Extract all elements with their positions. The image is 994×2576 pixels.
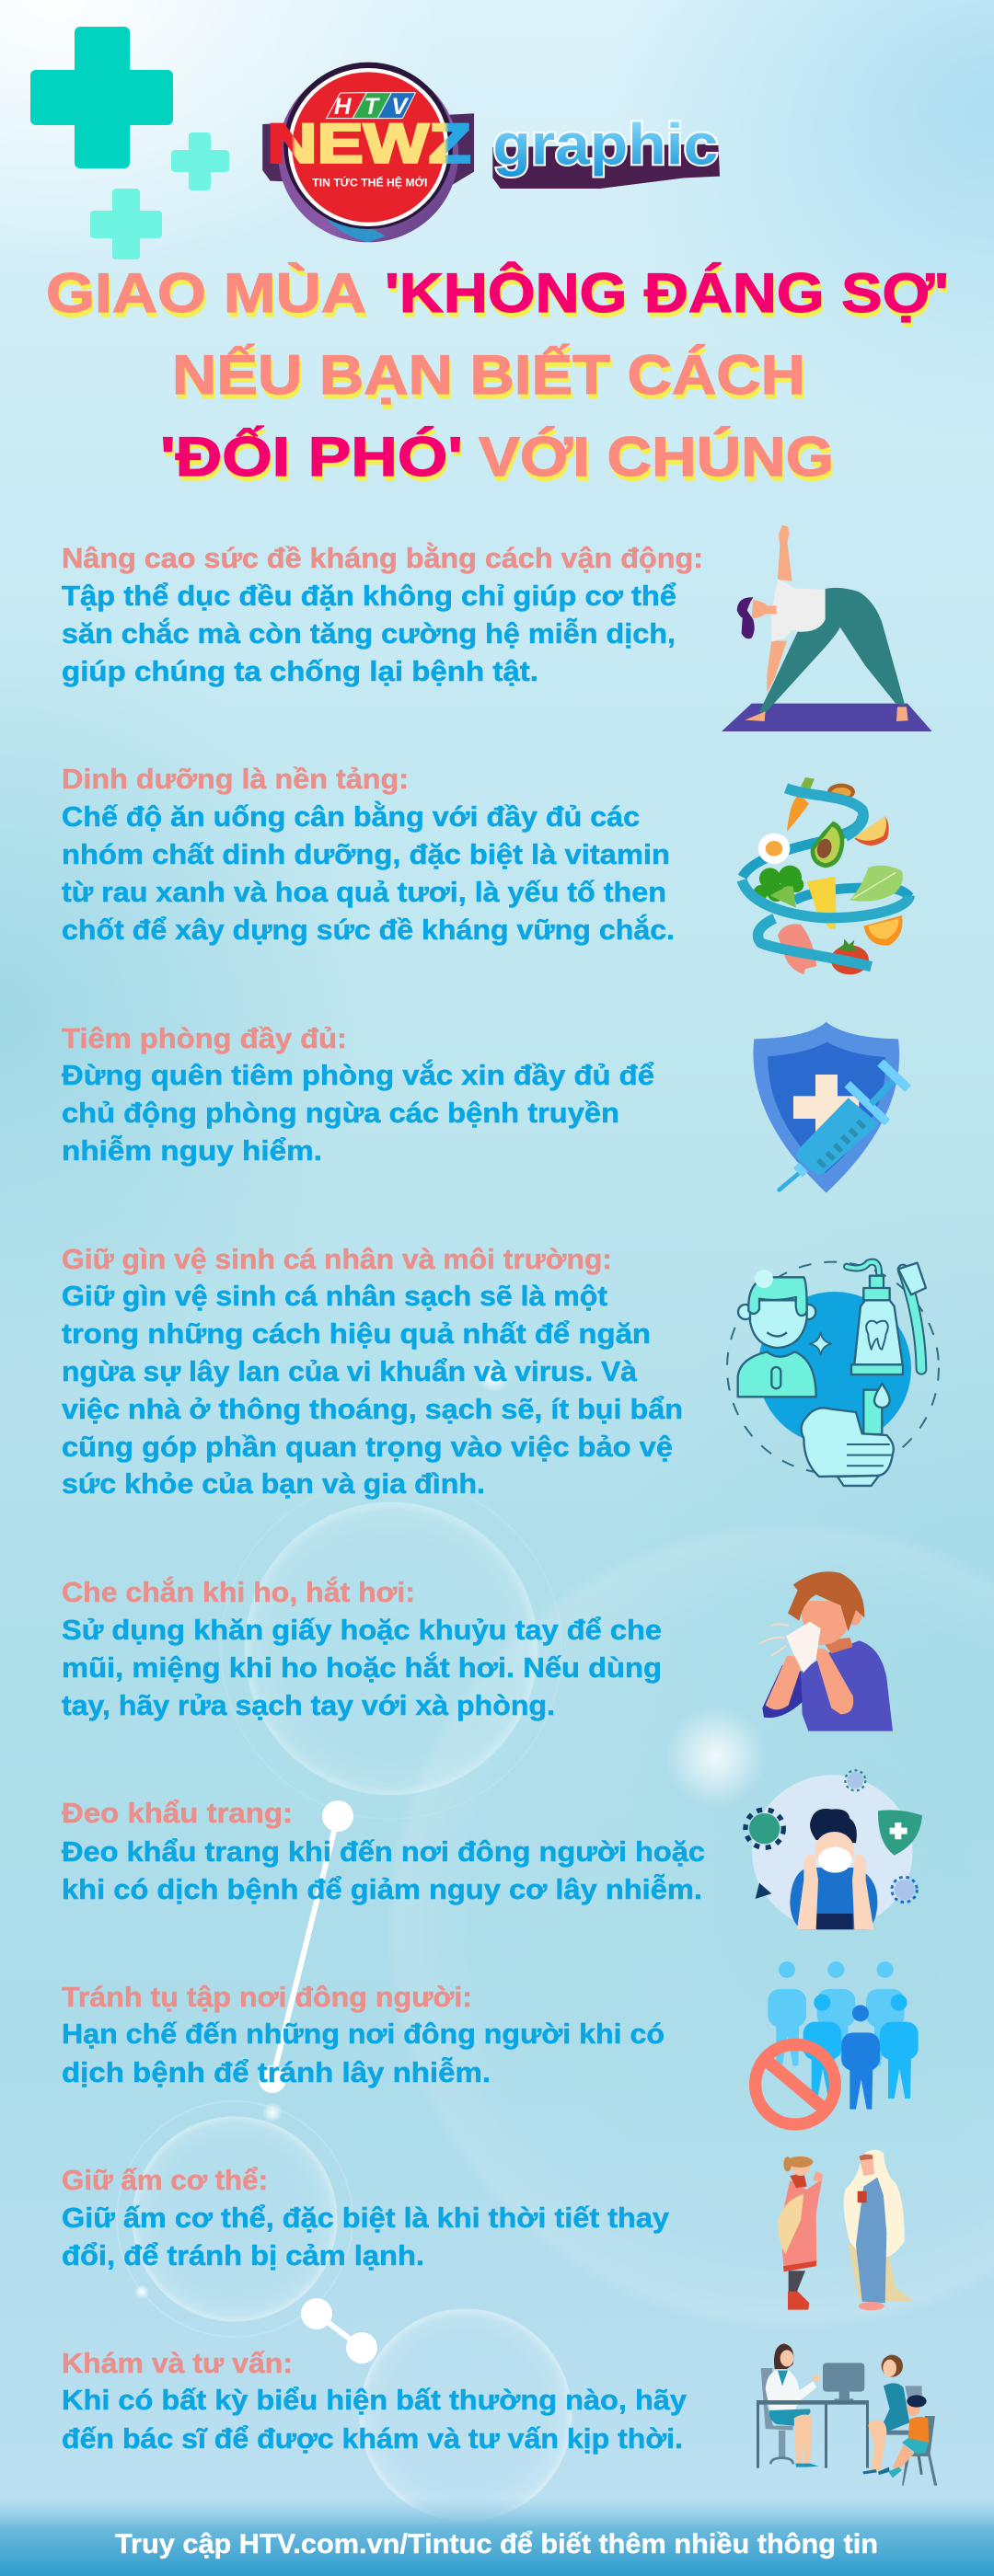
text block: check up [62,2384,688,2455]
text block: hygiene: cũng góp phần quan trọng vào việc bảo vệ [62,1431,673,1463]
text block: keep warm: Giữ ấm cơ thể, đặc biệt là khi thời tiết thay [62,2202,670,2234]
title: 'ĐỐI PHÓ' [160,426,463,488]
text block: mask [62,1835,705,1905]
icon: small cross bottom [90,189,162,259]
heading: vaccination: Tiêm phòng đầy đủ: [62,1022,347,1054]
heading: exercise: Nâng cao sức đề kháng bằng cách vận động: [62,541,703,574]
text block: vaccination: Đừng quên tiêm phòng vắc xin đầy đủ để [62,1058,654,1091]
title: GIAO MÙA [46,262,366,324]
panel: keep warm [62,2150,914,2310]
logo: HTV mark: HTV [334,94,409,120]
text block: keep warm [62,2202,670,2271]
icon: shield and syringe [753,1022,908,1193]
title: 'KHÔNG ĐÁNG SỢ' [385,262,949,324]
text block: check up: Khi có bất kỳ biểu hiện bất thường nào, hãy [62,2384,688,2416]
icon: food and measuring tape [742,777,909,974]
panel: check up [62,2343,937,2486]
text block: hygiene: sức khỏe của bạn và gia đình. [62,1467,485,1500]
logo: NEWZ badge: NEWZ [267,112,471,175]
text block: avoid crowds [62,2018,665,2088]
text block: vaccination: nhiễm nguy hiểm. [62,1134,322,1167]
panel: nutrition [62,763,909,974]
panel: vaccination [62,1022,908,1193]
text block: keep warm: đổi, để tránh bị cảm lạnh. [62,2239,424,2271]
text block: exercise: Tập thể dục đều đặn không chỉ giúp cơ thể [62,580,676,612]
icon: small cross right [171,132,229,190]
icon: doctor consultation [757,2343,937,2486]
text block: exercise: săn chắc mà còn tăng cường hệ miễn dịch, [62,616,676,650]
text block: nutrition: chốt để xây dựng sức đề kháng vững chắc. [62,913,675,946]
icon: small virus top [845,1770,865,1790]
text block: vaccination: chủ động phòng ngừa các bệnh truyền [62,1097,619,1129]
title [46,262,949,488]
text block: cover cough [62,1614,662,1721]
text block: avoid crowds: dịch bệnh để tránh lây nhiễm. [62,2056,491,2088]
text block: avoid crowds: Hạn chế đến những nơi đông người khi có [62,2018,665,2050]
footer text: Truy cập HTV.com.vn/Tintuc để biết thêm nhiều thông tin [115,2529,878,2559]
heading: hygiene: Giữ gìn vệ sinh cá nhân và môi trường: [62,1243,612,1275]
text block: cover cough: Sử dụng khăn giấy hoặc khuỷu tay để che [62,1614,662,1646]
panel: hygiene [62,1243,939,1500]
text block: nutrition: nhóm chất dinh dưỡng, đặc biệt là vitamin [62,838,670,870]
icon: person wearing mask [746,1770,922,1929]
text block: hygiene: Giữ gìn vệ sinh cá nhân sạch sẽ là một [62,1280,607,1312]
text block: vaccination [62,1058,654,1167]
logo: HTV NEWZ graphic [262,63,720,242]
icon: green virus [746,1810,783,1847]
icon: crowd with prohibition sign [756,1961,919,2124]
title: NẾU BẠN BIẾT CÁCH [172,344,805,406]
text block: hygiene: ngừa sự lây lan của vi khuẩn và virus. Và [62,1355,638,1387]
icon: triangle [756,1883,771,1899]
text block: exercise [62,580,676,687]
heading: avoid crowds: Tránh tụ tập nơi đông người: [62,1981,472,2013]
icon: green shield [878,1810,922,1856]
icon: blue virus [892,1877,917,1903]
decorative bubbles [117,1360,994,2522]
text block: exercise: giúp chúng ta chống lại bệnh tật. [62,655,538,687]
icon: personal hygiene [727,1262,939,1486]
panel: exercise [62,525,932,731]
text block: hygiene: trong những cách hiệu quả nhất để ngăn [62,1317,651,1350]
text block: nutrition: Chế độ ăn uống cân bằng với đầy đủ các [62,799,640,833]
text block: check up: đến bác sĩ để được khám và tư vấn kịp thời. [62,2422,683,2455]
text block: nutrition [62,799,675,946]
icon: sneezing boy [761,1571,893,1731]
text block: mask: Đeo khẩu trang khi đến nơi đông người hoặc [62,1835,705,1868]
title: VỚI CHÚNG [479,426,834,488]
text block: mask: khi có dịch bệnh để giảm nguy cơ lây nhiễm. [62,1873,702,1905]
panel: cover cough [62,1571,893,1731]
text block: hygiene [62,1280,683,1500]
icon: two women in warm clothes [778,2150,914,2310]
logo: NEWZ badge [262,63,474,242]
logo: graphic wordmark: graphic [492,111,718,177]
text block: nutrition: từ rau xanh và hoa quả tươi, là yếu tố then [62,876,666,908]
heading: keep warm: Giữ ấm cơ thể: [62,2164,268,2196]
icon: large teal cross [30,27,173,168]
text block: cover cough: mũi, miệng khi ho hoặc hắt hơi. Nếu dùng [62,1650,662,1684]
text block: hygiene: việc nhà ở thông thoáng, sạch sẽ, ít bụi bẩn [62,1393,683,1425]
logo: NEWZ badge: TIN TỨC THẾ HỆ MỚI [312,176,427,190]
panel: mask [62,1770,922,1929]
heading: cover cough: Che chắn khi ho, hắt hơi: [62,1575,415,1608]
heading: nutrition: Dinh dưỡng là nền tảng: [62,763,409,795]
heading: mask: Đeo khẩu trang: [62,1797,293,1829]
text block: cover cough: tay, hãy rửa sạch tay với xà phòng. [62,1689,555,1721]
panel: avoid crowds [62,1961,919,2124]
icon: yoga woman [722,525,932,731]
heading: check up: Khám và tư vấn: [62,2347,293,2379]
footer band [0,2497,994,2576]
